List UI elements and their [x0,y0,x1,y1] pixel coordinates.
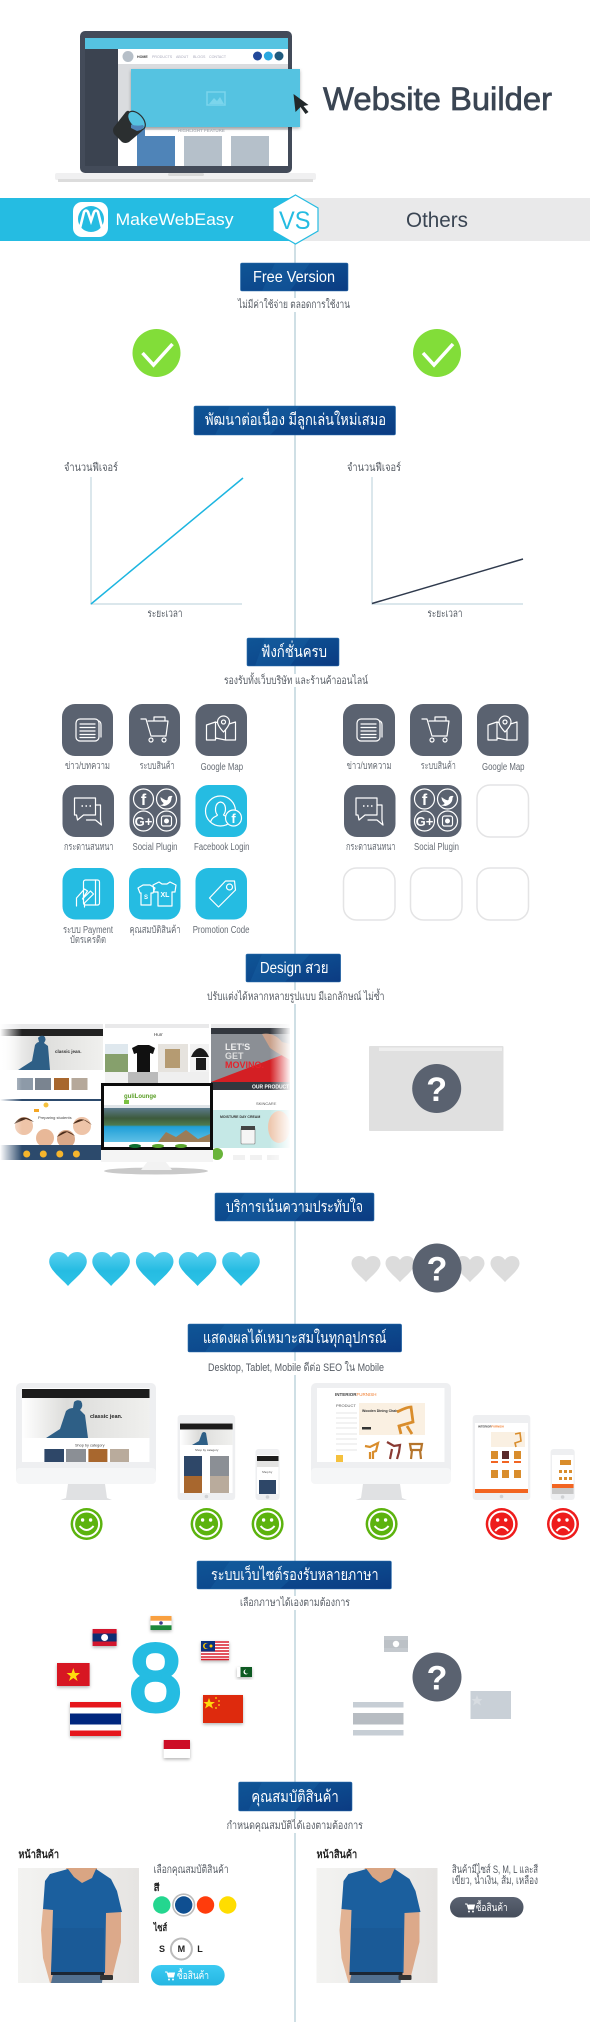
product description text: สินค้ามีไซส์ S, M, L และสี [452,1863,538,1876]
size selector: M [178,1944,185,1954]
icon: payment [62,868,114,946]
heading: impressive service [215,1193,374,1221]
hero: laptop illustration: CONTACT [209,55,227,59]
subtext: functions: รองรับทั้งเว็บบริษัท และร้านค้าออนไลน์ [224,672,368,687]
icon: social plugin [130,785,180,853]
comparison band: MakeWebEasy VS Others [0,195,590,244]
icon: news [343,704,395,772]
subtext: design [207,988,385,1004]
icon: product system: ระบบสินค้า [140,760,175,772]
edge fades [0,1024,291,1161]
icon: google map [477,704,528,773]
icon: happy others desktop [366,1508,398,1540]
heading: multi-language [197,1561,391,1589]
thumbnail: jeans store: classic jean. [55,1049,82,1054]
heading: responsive on all devices [188,1324,402,1352]
size selector: L [197,1944,203,1954]
thumbnail: sports store [211,1024,290,1090]
button: buy dark [450,1897,524,1918]
thumbnail: t-shirt store [105,1024,209,1084]
icon: green check left [132,329,180,377]
thumbnail: jeans store [0,1024,103,1090]
VS hexagon badge [273,195,318,244]
panel: Others product page [316,1848,538,1983]
heading: multi-language: ระบบเว็บไซต์รองรับหลายภาษา [211,1564,378,1584]
monitor: desktop: PRODUCT [336,1403,356,1408]
heading: impressive service: บริการเน้นความประทับใจ [226,1197,363,1216]
empty feature slots [344,785,528,920]
panel: MakeWebEasy functions [62,704,250,946]
product photo: blue t-shirt [18,1868,139,1983]
monitor: featured template [101,1083,213,1174]
monitor: desktop: classic jean. [90,1414,123,1420]
icon: mouse cursor [294,94,308,114]
panel: MakeWebEasy product page: เลือกคุณสมบัติสินค้า [154,1863,229,1876]
hero: laptop illustration: ABOUT [176,55,189,59]
thumbnail: sports store: OUR PRODUCT [252,1084,289,1090]
comparison band: MakeWebEasy VS Others: MakeWebEasy [116,210,234,229]
icon: promotion code: Promotion Code [193,925,250,936]
icon: news: ข่าว/บทความ [347,761,392,772]
thumbnail: school [0,1099,101,1160]
icon: google map: Google Map [201,762,243,773]
icon: forum: กระดานสนทนา [64,842,114,853]
rating: grey hearts with question [352,1244,520,1292]
chart: MakeWebEasy features over time: จำนวนฟีเจอร์ [64,461,118,474]
thumbnail: skincare: SKINCARE [256,1101,277,1106]
hero: laptop illustration: BLOGS [193,55,206,59]
panel: MakeWebEasy product page: หน้าสินค้า [18,1848,59,1861]
thumbnail: sports store: GET [225,1051,244,1061]
monitor: desktop: Wooden Dining Chair [362,1409,398,1413]
heading: beautiful design: Design สวย [260,960,328,977]
button: buy dark: ซื้อสินค้า [476,1900,508,1914]
flag: Vietnam [57,1663,90,1686]
row: smiley ratings [71,1508,579,1540]
icon: social plugin [410,785,462,853]
number 8: 8 [129,1625,182,1730]
product description text: เขียว, น้ำเงิน, ส้ม, เหลือง [452,1872,538,1887]
icon: google map: Google Map [482,762,525,773]
thumbnail: t-shirt store: Hurr [154,1032,163,1037]
heading: complete functions [247,638,339,666]
button: buy cyan: ซื้อสินค้า [177,1968,209,1982]
panel: Others languages [353,1636,511,1736]
icon: product system [410,704,462,772]
thumbnail: skincare: MOISTURE DAY CREAM [220,1115,260,1119]
flag: grey Thailand [353,1702,404,1736]
logo: MakeWebEasy [73,202,108,237]
phone [551,1449,575,1500]
chart: MakeWebEasy features over time: ระยะเวลา [148,608,182,620]
icon: forum [344,785,396,853]
icon: product attributes: คุณสมบัติสินค้า [130,924,180,936]
subtext: functions [224,672,368,687]
subtext: devices: Desktop, Tablet, Mobile ดีต่อ SEO ใน Mobile [208,1361,384,1374]
flag: India [150,1616,172,1630]
icon: question mark: ? [427,1250,447,1288]
chart: Others features over time: จำนวนฟีเจอร์ [347,461,401,474]
icon: product system: ระบบสินค้า [421,760,456,772]
flag: China [203,1695,243,1723]
icon: product system [129,704,180,772]
flag: Indonesia [164,1740,190,1758]
subtext: attributes: กำหนดคุณสมบัติได้เองตามต้องการ [227,1819,363,1832]
size selector [159,1938,203,1960]
title: Website Builder [323,81,552,117]
icon: green check right [413,329,461,377]
collage: website templates [0,1024,291,1174]
product photo: blue t-shirt [316,1868,438,1983]
icon: paint bucket [113,108,149,143]
thumbnail: sports store: LET'S [225,1042,250,1052]
panel: MakeWebEasy product page: สี [154,1882,160,1894]
hero: laptop illustration: PRODUCTS [152,55,173,59]
panel: Others functions [343,704,528,920]
icon: social plugin: Social Plugin [132,842,178,853]
button: buy cyan [151,1965,225,1986]
subtext: free version: ไม่มีค่าใช้จ่าย ตลอดการใช้งาน [237,298,350,311]
icon: question mark [412,1652,462,1702]
icon: social plugin: Social Plugin [414,842,459,853]
rating: five blue hearts [49,1252,260,1286]
icon: news: ข่าว/บทความ [65,761,110,772]
flag: Thailand [70,1702,121,1736]
chart: MakeWebEasy features over time [64,461,243,620]
icon: payment: บัตรเครดิต [70,935,106,946]
icon: promotion code [193,868,250,936]
monitor: desktop: INTERIORFURNISH [335,1392,377,1397]
monitor: desktop: Shop by category [75,1444,105,1448]
heading: responsive on all devices: แสดงผลได้เหมาะสมในทุกอุปกรณ์ [203,1328,387,1348]
heading: product attributes [239,1782,352,1811]
tablet: INTERIORFURNISH [478,1424,504,1428]
phone: Shop by [262,1470,273,1474]
icon: payment: ระบบ Payment [63,925,113,936]
icon: happy tablet [191,1508,223,1540]
thumbnail: school: Preparing students [38,1115,72,1120]
panel: MakeWebEasy product page: ไซส์ [153,1921,168,1934]
tablet [178,1415,235,1500]
subtext: free version [237,298,350,312]
icon: forum [62,785,114,853]
icon: image placeholder [207,92,225,105]
monitor: featured template: guliLounge [124,1094,157,1100]
icon: sad others phone [547,1508,579,1540]
thumbnail: skincare [211,1093,290,1160]
icon: happy desktop [71,1508,103,1540]
monitor: desktop [311,1383,451,1500]
colour swatches [153,1894,236,1916]
placeholder: Others unknown design [369,1046,504,1131]
icon: happy phone [252,1508,284,1540]
monitor: desktop [16,1383,156,1500]
heading: complete functions: ฟังก์ชั่นครบ [261,640,327,661]
icon: sad others tablet [486,1508,518,1540]
heading: Free Version [240,263,348,291]
icon: product attributes [129,868,180,936]
size selector: S [159,1944,165,1954]
icon: news [62,704,113,772]
hero: laptop illustration [55,31,316,182]
tablet [473,1415,530,1500]
tablet: Shop by category [195,1448,219,1452]
icon: facebook login [194,785,250,853]
flag: Laos [93,1629,117,1646]
hero: laptop illustration: HIGHLIGHT FEATURE [178,128,225,133]
panel: Others devices [311,1383,575,1500]
heading: product attributes: คุณสมบัติสินค้า [251,1788,339,1807]
hero: laptop illustration: HOME [137,55,148,59]
chart: Others features over time: ระยะเวลา [428,608,462,620]
flag: Malaysia [201,1641,229,1660]
panel: Others product page: หน้าสินค้า [316,1848,357,1861]
panel: MakeWebEasy product page [18,1848,236,1986]
heading: continuous development: พัฒนาต่อเนื่อง มีลูกเล่นใหม่เสมอ [205,408,386,430]
icon: google map [196,704,247,773]
heading: continuous development [194,406,396,435]
heading: Free Version: Free Version [253,269,335,286]
flag: grey Laos [384,1636,408,1652]
product description text [452,1863,538,1887]
panel: MakeWebEasy devices [16,1383,280,1500]
heading: beautiful design [246,954,341,982]
phone [256,1449,280,1500]
icon: question mark [412,1244,462,1292]
subtext: design: ปรับแต่งได้หลากหลายรูปแบบ มีเอกลักษณ์ ไม่ซ้ำ [207,988,384,1003]
panel: eight language flags [57,1616,252,1758]
subtext: language: เลือกภาษาได้เองตามต้องการ [240,1596,350,1609]
comparison band: MakeWebEasy VS Others: Others [406,209,468,232]
icon: question mark: ? [427,1660,447,1698]
icon: facebook login: Facebook Login [194,842,250,853]
VS hexagon badge: VS [279,207,310,235]
icon: forum: กระดานสนทนา [346,842,396,853]
icon: question mark: ? [426,1071,447,1109]
center divider line [294,244,296,2022]
chart: Others features over time [347,461,523,620]
thumbnail: sports store: MOVING. [225,1060,264,1070]
flag: grey China [470,1691,511,1719]
flag: Pakistan [237,1667,252,1677]
